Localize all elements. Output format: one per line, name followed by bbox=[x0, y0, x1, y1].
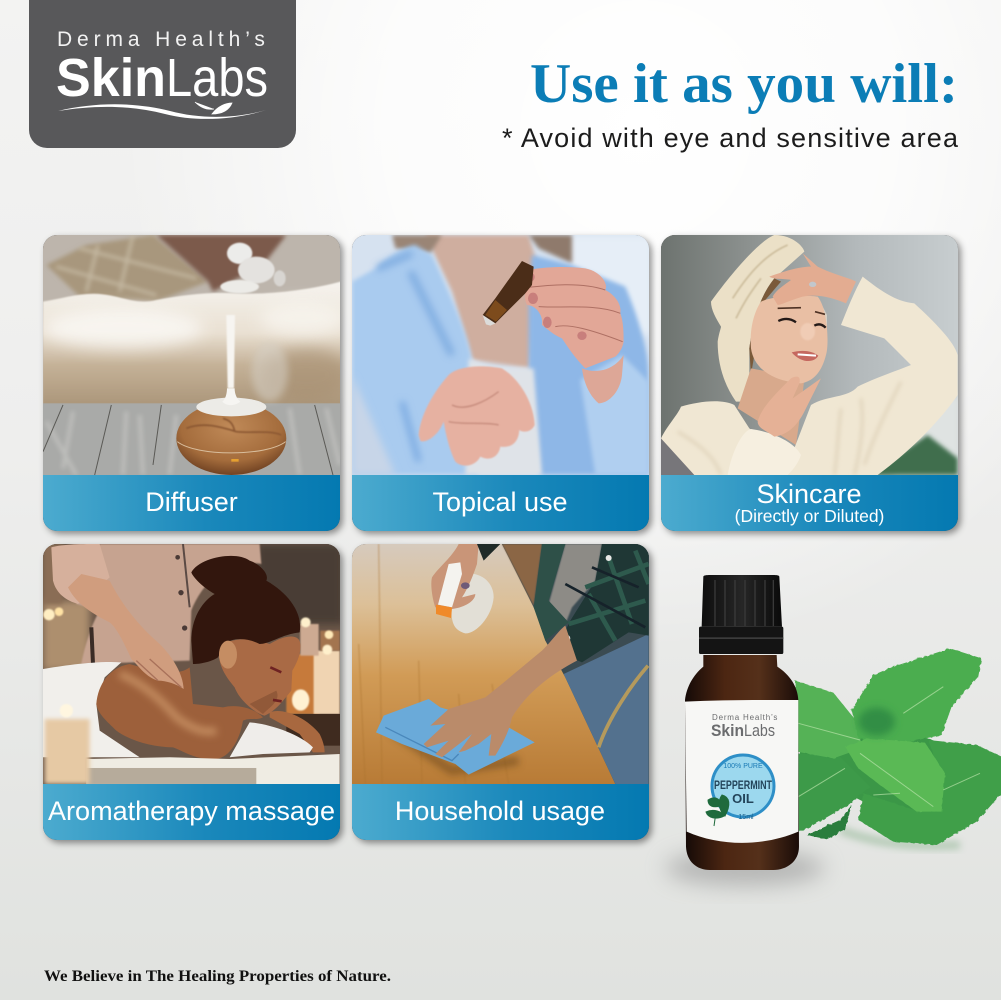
logo: Derma Health's SkinLabs: Derma Health’s bbox=[57, 28, 268, 51]
label: Topical use: Topical use bbox=[432, 487, 568, 517]
label: Diffuser: Diffuser bbox=[145, 487, 238, 517]
label: Skincare (Directly or Diluted): Skincare bbox=[756, 479, 862, 509]
label: Skincare (Directly or Diluted): (Directly or Diluted) bbox=[735, 506, 884, 526]
label: Household usage: Household usage bbox=[395, 796, 605, 826]
panel: Skincare bbox=[661, 235, 961, 531]
photo: hand wiping a wooden table with a blue cloth bbox=[352, 544, 652, 784]
label: Skincare (Directly or Diluted) bbox=[735, 479, 884, 526]
photo: aroma diffuser on a wooden table bbox=[43, 235, 350, 475]
logo: Derma Health's SkinLabs: Labs bbox=[166, 48, 268, 108]
label: Aromatherapy massage: Aromatherapy massage bbox=[48, 796, 335, 826]
tagline: We Believe in The Healing Properties of Nature. bbox=[44, 968, 391, 985]
photo: woman in towel and robe touching her face bbox=[661, 235, 961, 475]
label: bottle logo: Labs bbox=[744, 721, 775, 740]
label: bottle logo: Derma Health’s bbox=[712, 713, 778, 722]
logo: Derma Health's SkinLabs bbox=[29, 0, 296, 148]
panel: Diffuser bbox=[43, 235, 350, 531]
panel: Aromatherapy massage bbox=[43, 544, 343, 840]
panel: Topical use bbox=[352, 235, 652, 531]
label: bottle logo bbox=[711, 713, 778, 740]
label: peppermint badge: PEPPERMINT bbox=[714, 778, 772, 792]
label: peppermint badge bbox=[706, 755, 774, 826]
shadow bbox=[665, 850, 825, 886]
subtitle: caution note: * Avoid with eye and sensitive area bbox=[502, 123, 959, 153]
label: peppermint badge: OIL bbox=[732, 791, 754, 806]
title: Use it as you will: bbox=[530, 53, 958, 115]
label: bottle logo: Skin bbox=[711, 721, 744, 740]
label: peppermint badge: 100% PURE bbox=[723, 763, 763, 770]
photo: woman receiving a back massage by candlelight bbox=[43, 544, 343, 784]
panel: Household usage bbox=[352, 544, 652, 840]
label: peppermint badge: 15ml bbox=[738, 814, 754, 821]
bottle bbox=[685, 575, 799, 870]
photo: hand dropping oil from a bottle onto a palm bbox=[352, 235, 652, 475]
product: peppermint oil bottle and mint leaves bbox=[665, 575, 1001, 886]
logo: Derma Health's SkinLabs: Skin bbox=[56, 48, 166, 108]
icon: mint leaves bbox=[795, 648, 1001, 846]
